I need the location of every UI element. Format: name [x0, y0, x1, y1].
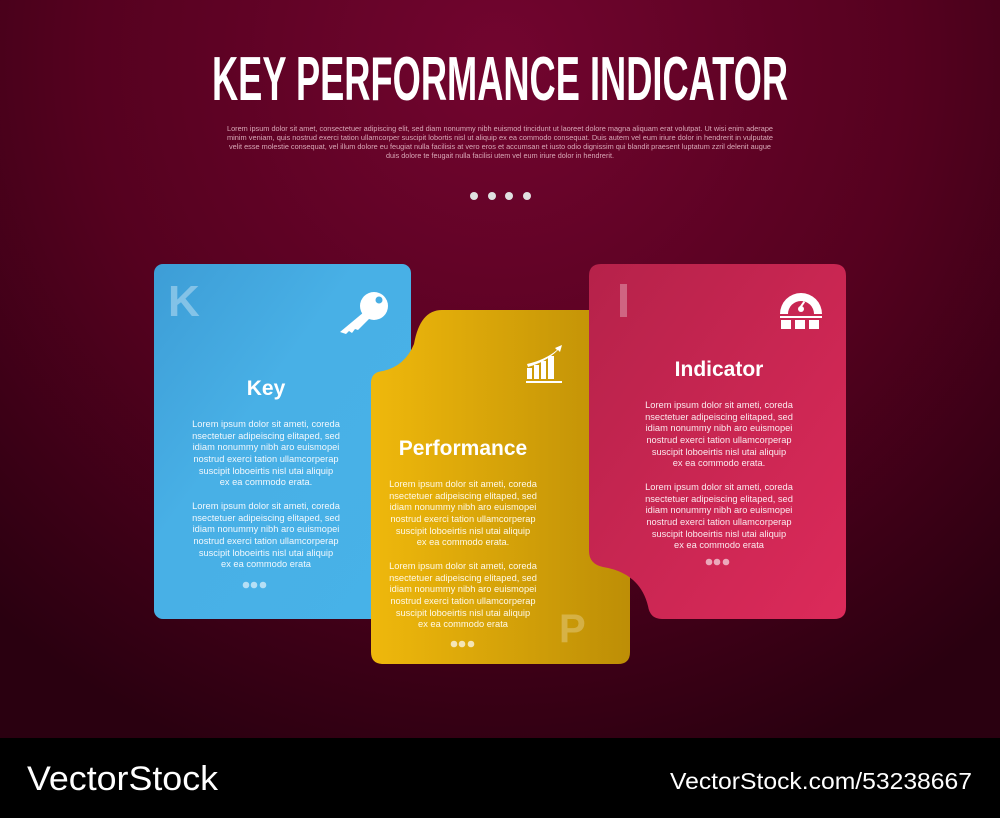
- body: indicator: [645, 400, 794, 550]
- panel: indicator: [589, 264, 846, 619]
- body: key: [192, 419, 341, 569]
- intro text: [227, 124, 773, 160]
- icon: gauge: [780, 293, 822, 329]
- heading: key: Key: [247, 377, 286, 400]
- body: performance: idiam nonummy nibh aro euismopei: [390, 502, 536, 512]
- body: indicator: ex ea commodo erata: [674, 540, 765, 550]
- icon: key: [340, 292, 388, 334]
- panel: performance: [371, 310, 630, 664]
- body: indicator: suscipit loboeirtis nisl utai aliquip: [652, 529, 786, 539]
- body: indicator: nostrud exerci tation ullamcorperap: [646, 435, 792, 445]
- body: key: Lorem ipsum dolor sit ameti, coreda: [192, 419, 341, 429]
- body: key: nostrud exerci tation ullamcorperap: [193, 454, 339, 464]
- body: performance: ex ea commodo erata: [418, 619, 509, 629]
- body: indicator: nostrud exerci tation ullamcorperap: [646, 517, 792, 527]
- letter P: P: [559, 607, 586, 651]
- body: performance: idiam nonummy nibh aro euismopei: [390, 584, 536, 594]
- body: key: idiam nonummy nibh aro euismopei: [193, 524, 339, 534]
- body: performance: Lorem ipsum dolor sit ameti, coreda: [389, 479, 538, 489]
- icon: growth chart: [526, 345, 562, 383]
- body: indicator: nsectetuer adipeiscing elitaped, sed: [645, 494, 793, 504]
- body: performance: suscipit loboeirtis nisl utai aliquip: [396, 526, 530, 536]
- body: key: ex ea commodo erata.: [220, 477, 312, 487]
- panel: key: [154, 264, 411, 619]
- letter I: [620, 284, 627, 317]
- intro text: minim veniam, quis nostrud exerci tation ullamcorper suscipit lobortis nisl ut aliquip ex ea commodo consequat. Duis autem vel eum iriure dolor in hendrerit in vulputate: [227, 133, 773, 142]
- body: key: nsectetuer adipeiscing elitaped, sed: [192, 513, 340, 523]
- body: key: ex ea commodo erata: [221, 559, 312, 569]
- body: indicator: idiam nonummy nibh aro euismopei: [646, 505, 792, 515]
- body: performance: nsectetuer adipeiscing elitaped, sed: [389, 573, 537, 583]
- body: performance: Lorem ipsum dolor sit ameti, coreda: [389, 561, 538, 571]
- body: key: idiam nonummy nibh aro euismopei: [193, 442, 339, 452]
- body: indicator: ex ea commodo erata.: [673, 458, 765, 468]
- dots: [470, 192, 531, 200]
- footer: VectorStock.com/53238667: [670, 768, 972, 794]
- body: indicator: Lorem ipsum dolor sit ameti, coreda: [645, 400, 794, 410]
- body: indicator: nsectetuer adipeiscing elitaped, sed: [645, 412, 793, 422]
- body: performance: nostrud exerci tation ullamcorperap: [390, 596, 536, 606]
- heading: performance: Performance: [399, 437, 527, 460]
- body: indicator: idiam nonummy nibh aro euismopei: [646, 423, 792, 433]
- body: key: nsectetuer adipeiscing elitaped, sed: [192, 431, 340, 441]
- footer: [0, 738, 1000, 818]
- heading: indicator: Indicator: [675, 358, 763, 381]
- intro text: velit esse molestie consequat, vel illum dolore eu feugiat nulla facilisis at vero eros et accumsan et iusto odio dignissim qui blandit praesent luptatum zzril delenit augue: [229, 142, 771, 151]
- body: indicator: Lorem ipsum dolor sit ameti, coreda: [645, 482, 794, 492]
- body: performance: nostrud exerci tation ullamcorperap: [390, 514, 536, 524]
- body: performance: ex ea commodo erata.: [417, 537, 509, 547]
- body: key: suscipit loboeirtis nisl utai aliquip: [199, 466, 333, 476]
- letter K: K: [168, 277, 200, 326]
- body: performance: suscipit loboeirtis nisl utai aliquip: [396, 608, 530, 618]
- footer: VectorStock: [27, 760, 219, 798]
- body: indicator: suscipit loboeirtis nisl utai aliquip: [652, 447, 786, 457]
- body: key: nostrud exerci tation ullamcorperap: [193, 536, 339, 546]
- intro text: Lorem ipsum dolor sit amet, consectetuer adipiscing elit, sed diam nonummy nibh euismod tincidunt ut laoreet dolore magna aliquam erat volutpat. Ut wisi enim aderape: [227, 124, 773, 133]
- body: key: suscipit loboeirtis nisl utai aliquip: [199, 548, 333, 558]
- body: performance: [389, 479, 538, 629]
- body: key: Lorem ipsum dolor sit ameti, coreda: [192, 501, 341, 511]
- intro text: duis dolore te feugait nulla facilisi utem vel eum iriure dolor in hendrerit.: [386, 151, 614, 160]
- body: performance: nsectetuer adipeiscing elitaped, sed: [389, 491, 537, 501]
